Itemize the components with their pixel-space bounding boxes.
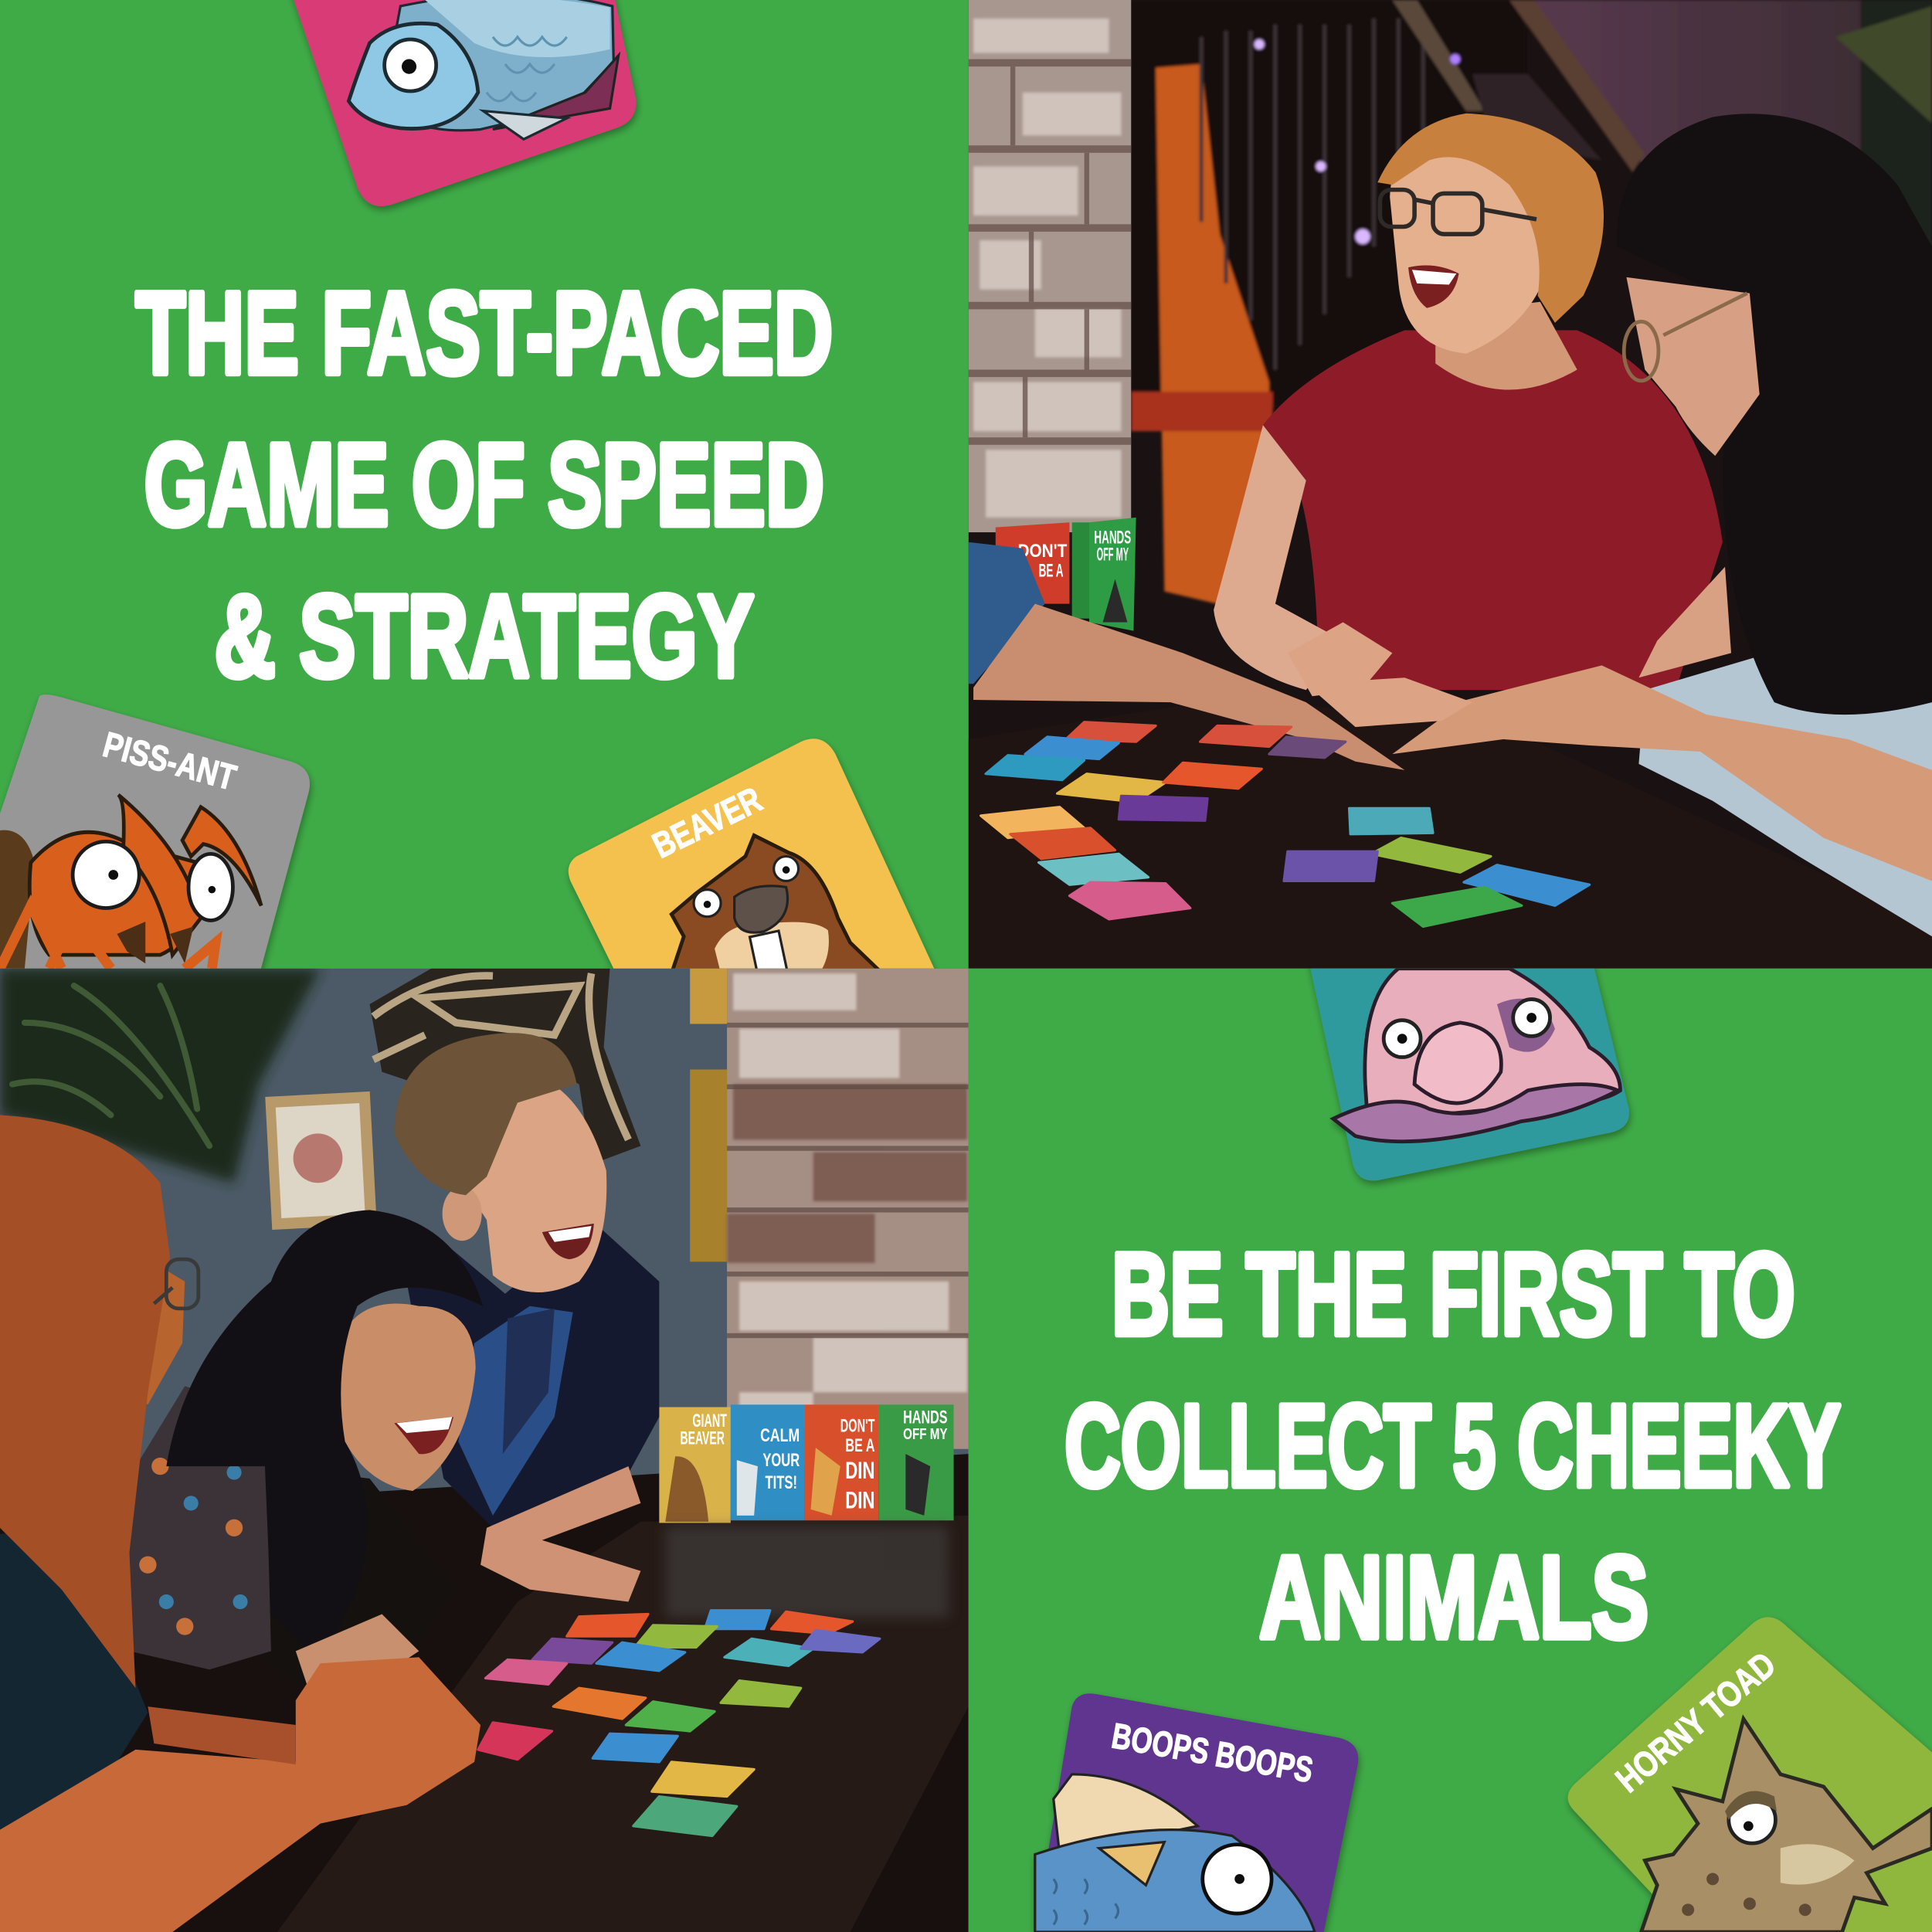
table	[277, 1516, 969, 1932]
photo: woman in red shirt and friends playing	[969, 0, 1932, 969]
product boxes: BEAVER	[680, 1428, 725, 1448]
card: boops boops	[1033, 1693, 1358, 1932]
laughing woman with dark hair	[117, 1210, 483, 1688]
product boxes: DIN	[845, 1456, 874, 1484]
woman in foreground	[0, 1115, 480, 1932]
product boxes: GIANT	[692, 1411, 727, 1431]
product boxes: YOUR	[762, 1450, 800, 1471]
product boxes: OFF MY	[903, 1425, 948, 1443]
man's arm	[969, 542, 1472, 770]
product boxes on table: DON'T	[1017, 541, 1068, 562]
product boxes	[659, 1404, 954, 1618]
product boxes on table: HANDS	[1094, 527, 1131, 548]
card: piss-ant: PISS-ANT	[99, 724, 240, 798]
panel: collect five animals	[969, 949, 1932, 1932]
card: piss-ant	[0, 694, 310, 986]
photo: group laughing around table	[0, 969, 969, 1932]
table	[969, 739, 1932, 969]
brick pillar	[727, 969, 969, 1449]
heading: fast-paced game: & STRATEGY	[215, 572, 754, 702]
toad illustration	[1642, 1719, 1932, 1932]
card: horny toad: HORNY TOAD	[1608, 1644, 1783, 1800]
background room	[1131, 0, 1932, 616]
heading: be the first: ANIMALS	[1259, 1533, 1648, 1663]
plant and wall art	[0, 969, 727, 1261]
panel: speed and strategy	[0, 0, 969, 986]
ant illustration	[0, 795, 261, 969]
fish illustration	[1035, 1774, 1315, 1932]
card: beaver	[569, 739, 936, 976]
card: pink fish	[276, 0, 636, 206]
product boxes: BE A	[845, 1435, 874, 1456]
woman in red	[1214, 114, 1731, 690]
heading: fast-paced game: THE FAST-PACED	[135, 268, 833, 399]
product boxes on table: BE A	[1039, 560, 1064, 581]
heading: fast-paced game	[135, 268, 833, 702]
card: horny toad	[1568, 1617, 1932, 1932]
woman with dark hair	[1392, 114, 1932, 936]
laughing man	[394, 1033, 659, 1602]
blobfish illustration	[1333, 969, 1620, 1142]
product boxes: TITS!	[766, 1472, 797, 1493]
beaver illustration	[671, 835, 882, 976]
product boxes: HANDS	[903, 1407, 948, 1428]
card: beaver: BEAVER	[647, 779, 768, 866]
brick wall	[969, 0, 1131, 532]
product boxes on table	[996, 518, 1136, 631]
dark lower room	[0, 1454, 969, 1932]
heading: fast-paced game: GAME OF SPEED	[144, 419, 824, 550]
product boxes on table: OFF MY	[1097, 545, 1129, 565]
product boxes: CALM	[760, 1425, 800, 1446]
product boxes: DON'T	[840, 1415, 875, 1436]
cards on table	[981, 722, 1590, 926]
heading: be the first	[1064, 1229, 1841, 1663]
card: blobfish	[1306, 949, 1629, 1180]
cards on table	[478, 1611, 880, 1836]
card: boops boops: BOOPS BOOPS	[1109, 1715, 1316, 1790]
product boxes: DIN	[845, 1486, 874, 1513]
